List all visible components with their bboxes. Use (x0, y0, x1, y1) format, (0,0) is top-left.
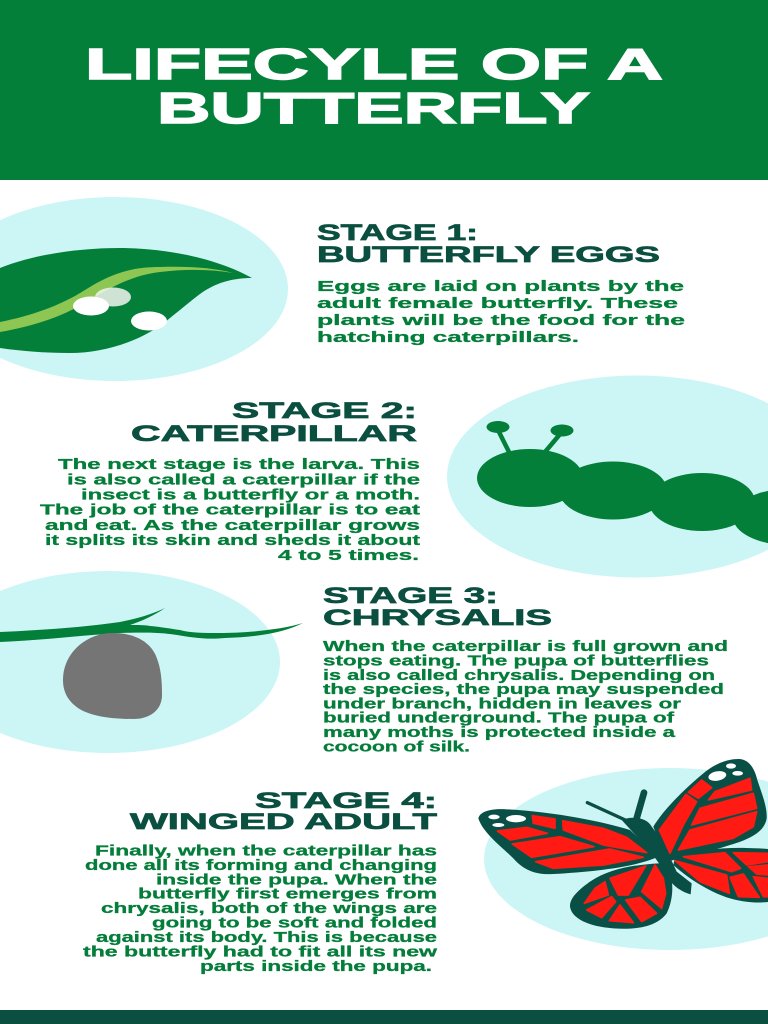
title banner (0, 0, 768, 180)
text block: stage 2: is also called a caterpillar if the (67, 472, 420, 488)
heading: stage 3 (323, 583, 552, 630)
text block: stage 2 (40, 457, 420, 564)
text block: stage 3: is also called chrysalis. Depending on (323, 668, 715, 684)
title banner: BUTTERFLY (157, 84, 590, 133)
panel: stage 1 butterfly eggs (0, 197, 685, 381)
panel: stage 2 caterpillar (40, 376, 768, 578)
text block: stage 2: 4 to 5 times. (278, 548, 419, 564)
text block: stage 2: it splits its skin and sheds it about (45, 533, 420, 549)
text block: stage 4: Finally, when the caterpillar has (95, 844, 437, 860)
heading: stage 1: STAGE 1: (317, 220, 478, 245)
text block: stage 4: inside the pupa. When the (156, 872, 437, 888)
title banner: LIFECYLE OF A (85, 40, 663, 89)
heading: stage 2: CATERPILLAR (131, 421, 417, 446)
text block: stage 1: plants will be the food for the (317, 313, 685, 329)
heading: stage 1: BUTTERFLY EGGS (317, 242, 660, 267)
heading: stage 3: STAGE 3: (323, 583, 498, 608)
heading: stage 4: WINGED ADULT (130, 809, 438, 834)
text block: stage 3: cocoon of silk. (323, 740, 470, 756)
text block: stage 3: buried underground. The pupa of (323, 710, 674, 726)
icon: caterpillar (447, 376, 768, 578)
text block: stage 3: under branch, hidden in leaves or (323, 696, 681, 712)
text block: stage 3: When the caterpillar is full grown and (323, 639, 728, 655)
text block: stage 2: The job of the caterpillar is to eat (40, 502, 420, 518)
heading: stage 3: CHRYSALIS (323, 605, 552, 630)
text block: stage 3: the species, the pupa may suspended (323, 682, 724, 698)
icon: chrysalis on branch (0, 571, 303, 753)
text block: stage 3 (323, 639, 728, 756)
heading: stage 4: STAGE 4: (255, 788, 437, 813)
text block: stage 2: and eat. As the caterpillar grows (45, 518, 420, 534)
text block: stage 4: done all its forming and changing (85, 858, 437, 874)
text block: stage 4 (83, 844, 438, 975)
text block: stage 4: parts inside the pupa. (200, 959, 432, 975)
text block: stage 2: The next stage is the larva. This (58, 457, 420, 473)
text block: stage 3: stops eating. The pupa of butterflies (323, 654, 709, 670)
text block: stage 4: butterfly first emerges from (138, 886, 437, 902)
text block: stage 1: hatching caterpillars. (317, 330, 579, 346)
text block: stage 4: chrysalis, both of the wings are (101, 901, 437, 917)
text block: stage 1 (317, 279, 685, 346)
icon: leaf with eggs (0, 197, 288, 381)
text block: stage 1: Eggs are laid on plants by the (317, 279, 684, 295)
text block: stage 4: the butterfly had to fit all its new (83, 944, 438, 960)
text block: stage 4: going to be soft and folded (152, 916, 437, 932)
heading: stage 2 (131, 398, 417, 446)
footer bar (0, 1010, 768, 1024)
heading: stage 1 (317, 220, 660, 267)
icon: butterfly (478, 759, 768, 950)
heading: stage 2: STAGE 2: (232, 398, 417, 423)
panel: stage 3 chrysalis (0, 571, 728, 756)
text block: stage 4: against its body. This is because (96, 930, 437, 946)
panel: stage 4 winged adult (83, 759, 768, 975)
heading: stage 4 (130, 788, 438, 834)
text block: stage 1: adult female butterfly. These (317, 296, 678, 312)
text block: stage 2: insect is a butterfly or a moth. (81, 488, 420, 504)
text block: stage 3: many moths is protected inside a (323, 725, 676, 741)
